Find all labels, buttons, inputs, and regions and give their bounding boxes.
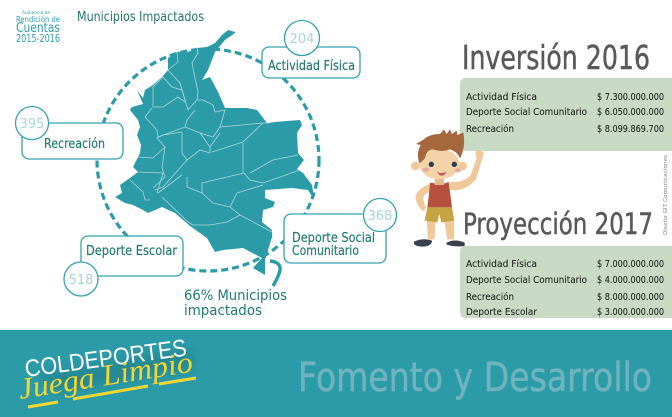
- footer banner: [0, 330, 672, 417]
- label: Actividad Física 204: Actividad Física: [268, 59, 355, 74]
- panel: Proyección 2017 table: Recreación: [466, 291, 514, 303]
- panel: Inversión 2016 table: Actividad Física: [466, 91, 537, 103]
- icon: waving boy character: [411, 129, 484, 247]
- label: Actividad Física 204: 204: [290, 32, 314, 47]
- label: Deporte Escolar 518: [64, 236, 183, 296]
- label: Recreación 395: [16, 106, 123, 159]
- panel: Proyección 2017 table: Actividad Física: [466, 258, 537, 270]
- text: 66% Municipios impactados: impactados: [184, 303, 262, 319]
- credit: vertical text: Diseño GIT Comunicaciones: [663, 155, 669, 235]
- label: Deporte Escolar 518: 518: [69, 273, 93, 288]
- label: Recreación 395: Recreación: [44, 137, 105, 152]
- logo: Coldeportes Juega Limpio: COLDEPORTES: [23, 335, 188, 383]
- label: Deporte Escolar 518: Deporte Escolar: [86, 244, 178, 259]
- panel: Inversión 2016 table: [460, 78, 672, 151]
- pointer: curved hook to map: [270, 261, 280, 286]
- label: Deporte Social Comunitario 368: Deporte Social: [292, 231, 375, 246]
- label: Deporte Social Comunitario 368: 368: [368, 209, 392, 224]
- logo: Audiencia de Rendición de Cuentas: [16, 10, 60, 45]
- logo: Audiencia de Rendición de Cuentas: 2015-2016: [16, 32, 60, 45]
- label: Deporte Social Comunitario 368: Comunitario: [292, 244, 359, 259]
- heading: Municipios Impactados: Municipios Impactados: [77, 10, 204, 25]
- panel: Inversión 2016 table: Recreación: [466, 123, 514, 135]
- dashed circle around map: [97, 49, 319, 271]
- logo: Audiencia de Rendición de Cuentas: Audiencia de: [22, 10, 51, 15]
- panel: Proyección 2017 table: Deporte Escolar: [466, 307, 538, 318]
- logo: Coldeportes Juega Limpio: Juega Limpio: [16, 346, 195, 406]
- map of Colombia: [115, 30, 314, 275]
- panel: Proyección 2017 table: [460, 246, 672, 318]
- panel: Proyección 2017 table: Deporte Social Comunitario: [466, 275, 587, 286]
- label: Actividad Física 204: [262, 20, 360, 78]
- logo: Audiencia de Rendición de Cuentas: Rendición de: [16, 14, 60, 24]
- text: 66% Municipios impactados: 66% Municipios: [184, 288, 287, 304]
- panel: Inversión 2016 table: Deporte Social Comunitario: [466, 107, 587, 118]
- logo: Audiencia de Rendición de Cuentas: Cuentas: [16, 21, 60, 36]
- text: 66% Municipios impactados: [184, 288, 287, 319]
- label: Deporte Social Comunitario 368: [284, 198, 396, 263]
- label: Recreación 395: 395: [20, 117, 44, 132]
